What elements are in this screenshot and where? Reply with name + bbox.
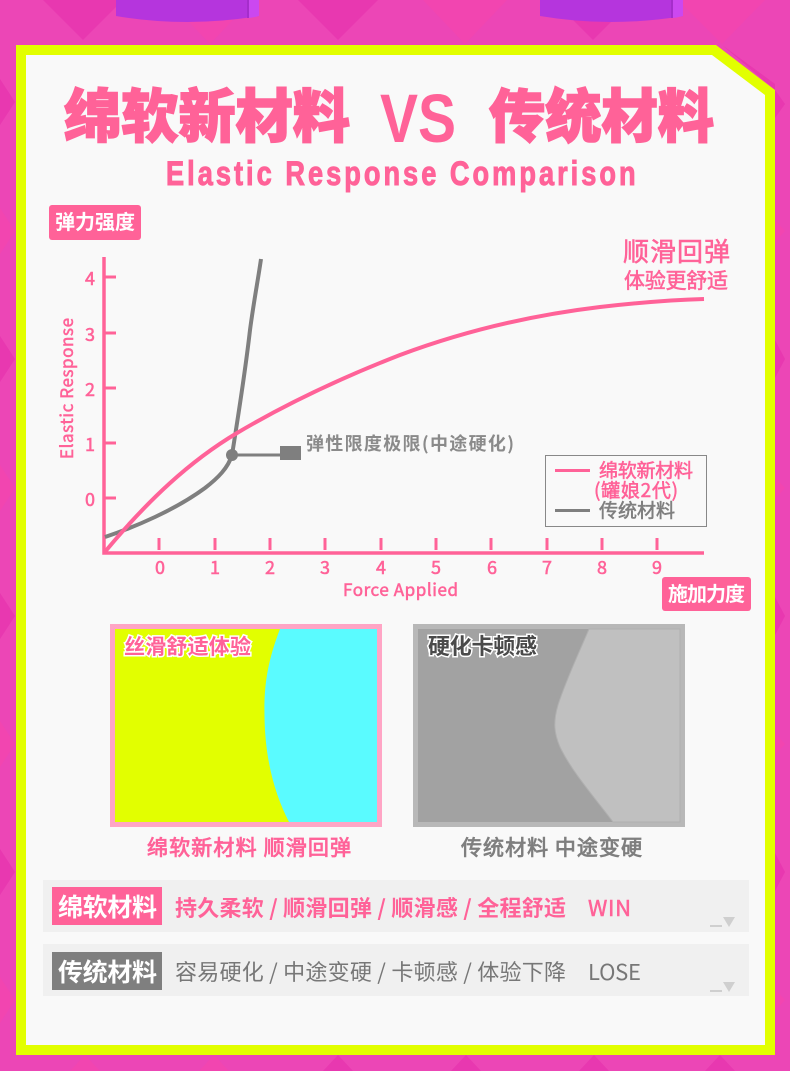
x axis numbers: 5	[431, 554, 441, 580]
elastic limit label: 弹性限度极限(中途硬化)	[306, 430, 514, 456]
x axis numbers: 2	[265, 554, 275, 580]
panel: hardened experience: 硬化卡顿感	[428, 629, 537, 661]
line chart	[53, 232, 730, 601]
row: new material summary: WIN	[588, 891, 631, 923]
y axis title: Elastic Response	[53, 318, 78, 459]
row: new material summary: 绵软材料	[58, 888, 157, 924]
y axis numbers: 2	[85, 376, 95, 402]
x axis numbers: 3	[320, 554, 330, 580]
x axis numbers: 9	[652, 554, 662, 580]
title: 传统材料	[489, 70, 714, 154]
legend: 绵软新材料	[599, 456, 693, 483]
legend: (罐娘2代)	[594, 476, 678, 503]
elastic limit marker	[226, 446, 301, 461]
row: traditional material summary: LOSE	[588, 955, 641, 987]
x axis tag: 施加力度	[668, 578, 745, 607]
row: traditional material summary	[43, 944, 749, 996]
row: new material summary	[43, 880, 749, 932]
y axis numbers: 4	[85, 265, 95, 291]
panel: smooth experience	[110, 624, 382, 827]
caption: new material: 绵软新材料 顺滑回弹	[147, 832, 351, 862]
panel: smooth experience: 丝滑舒适体验	[124, 631, 251, 661]
purple can bottom left	[116, 0, 259, 22]
y axis numbers: 1	[85, 431, 95, 457]
legend: 传统材料	[599, 496, 675, 523]
curve annotation: 体验更舒适	[624, 265, 728, 295]
row: traditional material summary: 容易硬化 / 中途变硬 / 卡顿感 / 体验下降	[175, 955, 566, 987]
subtitle: Elastic Response Comparison	[166, 154, 636, 193]
x axis numbers: 6	[487, 554, 497, 580]
x axis numbers: 8	[597, 554, 607, 580]
curve annotation	[623, 232, 730, 295]
legend	[546, 456, 706, 526]
x axis numbers: 1	[210, 554, 220, 580]
curve annotation: 顺滑回弹	[623, 232, 730, 269]
title: VS	[380, 80, 456, 157]
pink curve: new material	[104, 299, 704, 553]
panel: hardened experience	[413, 624, 685, 827]
y axis numbers: 0	[85, 486, 95, 512]
chart axes	[104, 257, 704, 553]
y axis numbers	[85, 265, 95, 512]
y axis numbers: 3	[85, 321, 95, 347]
x axis numbers	[155, 554, 662, 580]
x axis numbers: 4	[376, 554, 386, 580]
x axis numbers: 0	[155, 554, 165, 580]
purple can bottom right	[540, 0, 683, 22]
row: traditional material summary: 传统材料	[58, 953, 157, 989]
x axis title: Force Applied	[343, 576, 458, 601]
gray curve: traditional material	[105, 259, 261, 537]
x axis numbers: 7	[542, 554, 552, 580]
row: new material summary: 持久柔软 / 顺滑回弹 / 顺滑感 / 全程舒适	[175, 891, 566, 923]
title	[64, 70, 714, 157]
title: 绵软新材料	[64, 70, 350, 154]
caption: traditional material: 传统材料 中途变硬	[461, 832, 642, 862]
y axis tag: 弹力强度	[55, 206, 135, 235]
